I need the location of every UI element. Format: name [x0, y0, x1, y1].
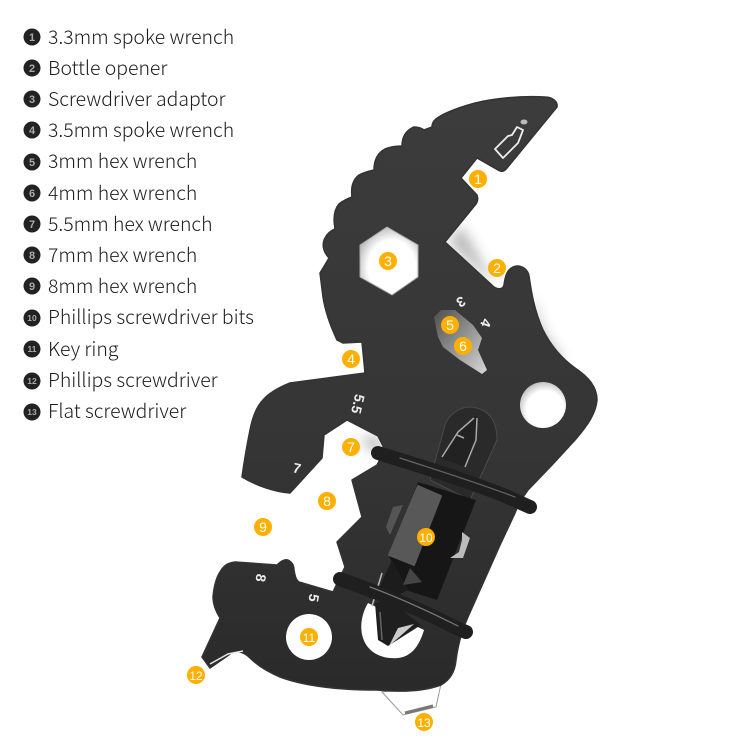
engraved size labels: 3 [453, 293, 468, 311]
legend item 12: 12 [27, 376, 37, 386]
legend item 1: 3.3mm spoke wrench [48, 21, 234, 50]
bottle icon [495, 120, 528, 158]
lower bit slot [361, 603, 424, 658]
legend item 2: Bottle opener [48, 52, 168, 81]
legend item 11: 11 [28, 344, 37, 354]
lower O-ring [340, 579, 466, 632]
engraved size labels [252, 293, 495, 603]
orange callout markers: 4 [347, 351, 355, 367]
hex wrench cutout [434, 310, 487, 374]
soft shadows beside the tool [360, 226, 563, 452]
bottom Phillips bit tip [375, 600, 421, 646]
legend item 8: 7mm hex wrench [48, 239, 197, 268]
orange callout markers: 12 [189, 669, 203, 683]
legend item 4: 4 [29, 125, 36, 137]
orange callout markers: 8 [323, 493, 331, 509]
legend item 7: 7 [29, 219, 35, 231]
engraved size labels: 7 [292, 459, 303, 477]
orange callout markers: 10 [419, 531, 433, 545]
legend item 2: 2 [29, 63, 35, 75]
orange callout markers: 3 [384, 253, 392, 269]
legend item 7: 5.5mm hex wrench [48, 208, 213, 237]
engraved size labels: 8 [252, 573, 270, 583]
legend item 10: 10 [27, 313, 37, 323]
legend item 3: 3 [29, 94, 35, 106]
engraved size labels: 5.5 [348, 393, 368, 415]
legend item 5: 3mm hex wrench [48, 145, 197, 174]
engraved size labels: 4 [477, 317, 495, 330]
multi-tool illustration [187, 97, 597, 731]
legend item 8: 8 [29, 250, 35, 262]
legend item 13: 13 [27, 407, 37, 417]
orange callout markers: 13 [417, 716, 431, 730]
legend item 13: Flat screwdriver [48, 395, 187, 424]
legend item 11: Key ring [48, 333, 119, 362]
upper O-ring [378, 453, 530, 507]
key ring hole [286, 614, 332, 660]
orange callout markers [187, 170, 506, 731]
legend item 9: 8mm hex wrench [48, 270, 197, 299]
orange callout markers: 2 [493, 260, 501, 276]
legend item 3: Screwdriver adaptor [48, 83, 227, 112]
round hole [520, 382, 566, 428]
hex hole: screwdriver adaptor [360, 227, 418, 295]
flat screwdriver blade [382, 684, 441, 715]
legend item 6: 4mm hex wrench [48, 177, 197, 206]
legend item 12: Phillips screwdriver [48, 364, 219, 393]
orange callout markers: 9 [259, 519, 267, 535]
legend item 9: 9 [29, 281, 35, 293]
bit body [372, 482, 476, 606]
orange callout markers: 1 [474, 171, 482, 187]
top Phillips bit tip [441, 415, 477, 467]
tool body silhouette [202, 97, 597, 691]
legend list [24, 21, 254, 424]
legend item 5: 5 [29, 157, 35, 169]
legend item 6: 6 [29, 188, 35, 200]
legend item 4: 3.5mm spoke wrench [48, 114, 234, 143]
orange callout markers: 6 [459, 338, 467, 354]
legend item 10: Phillips screwdriver bits [48, 301, 254, 330]
orange callout markers: 11 [303, 631, 316, 645]
legend item 1: 1 [29, 32, 35, 44]
upper bit slot [430, 407, 497, 500]
Phillips driver highlight [210, 651, 243, 664]
orange callout markers: 7 [347, 439, 355, 455]
orange callout markers: 5 [446, 317, 454, 333]
engraved size labels: 5 [305, 593, 323, 603]
